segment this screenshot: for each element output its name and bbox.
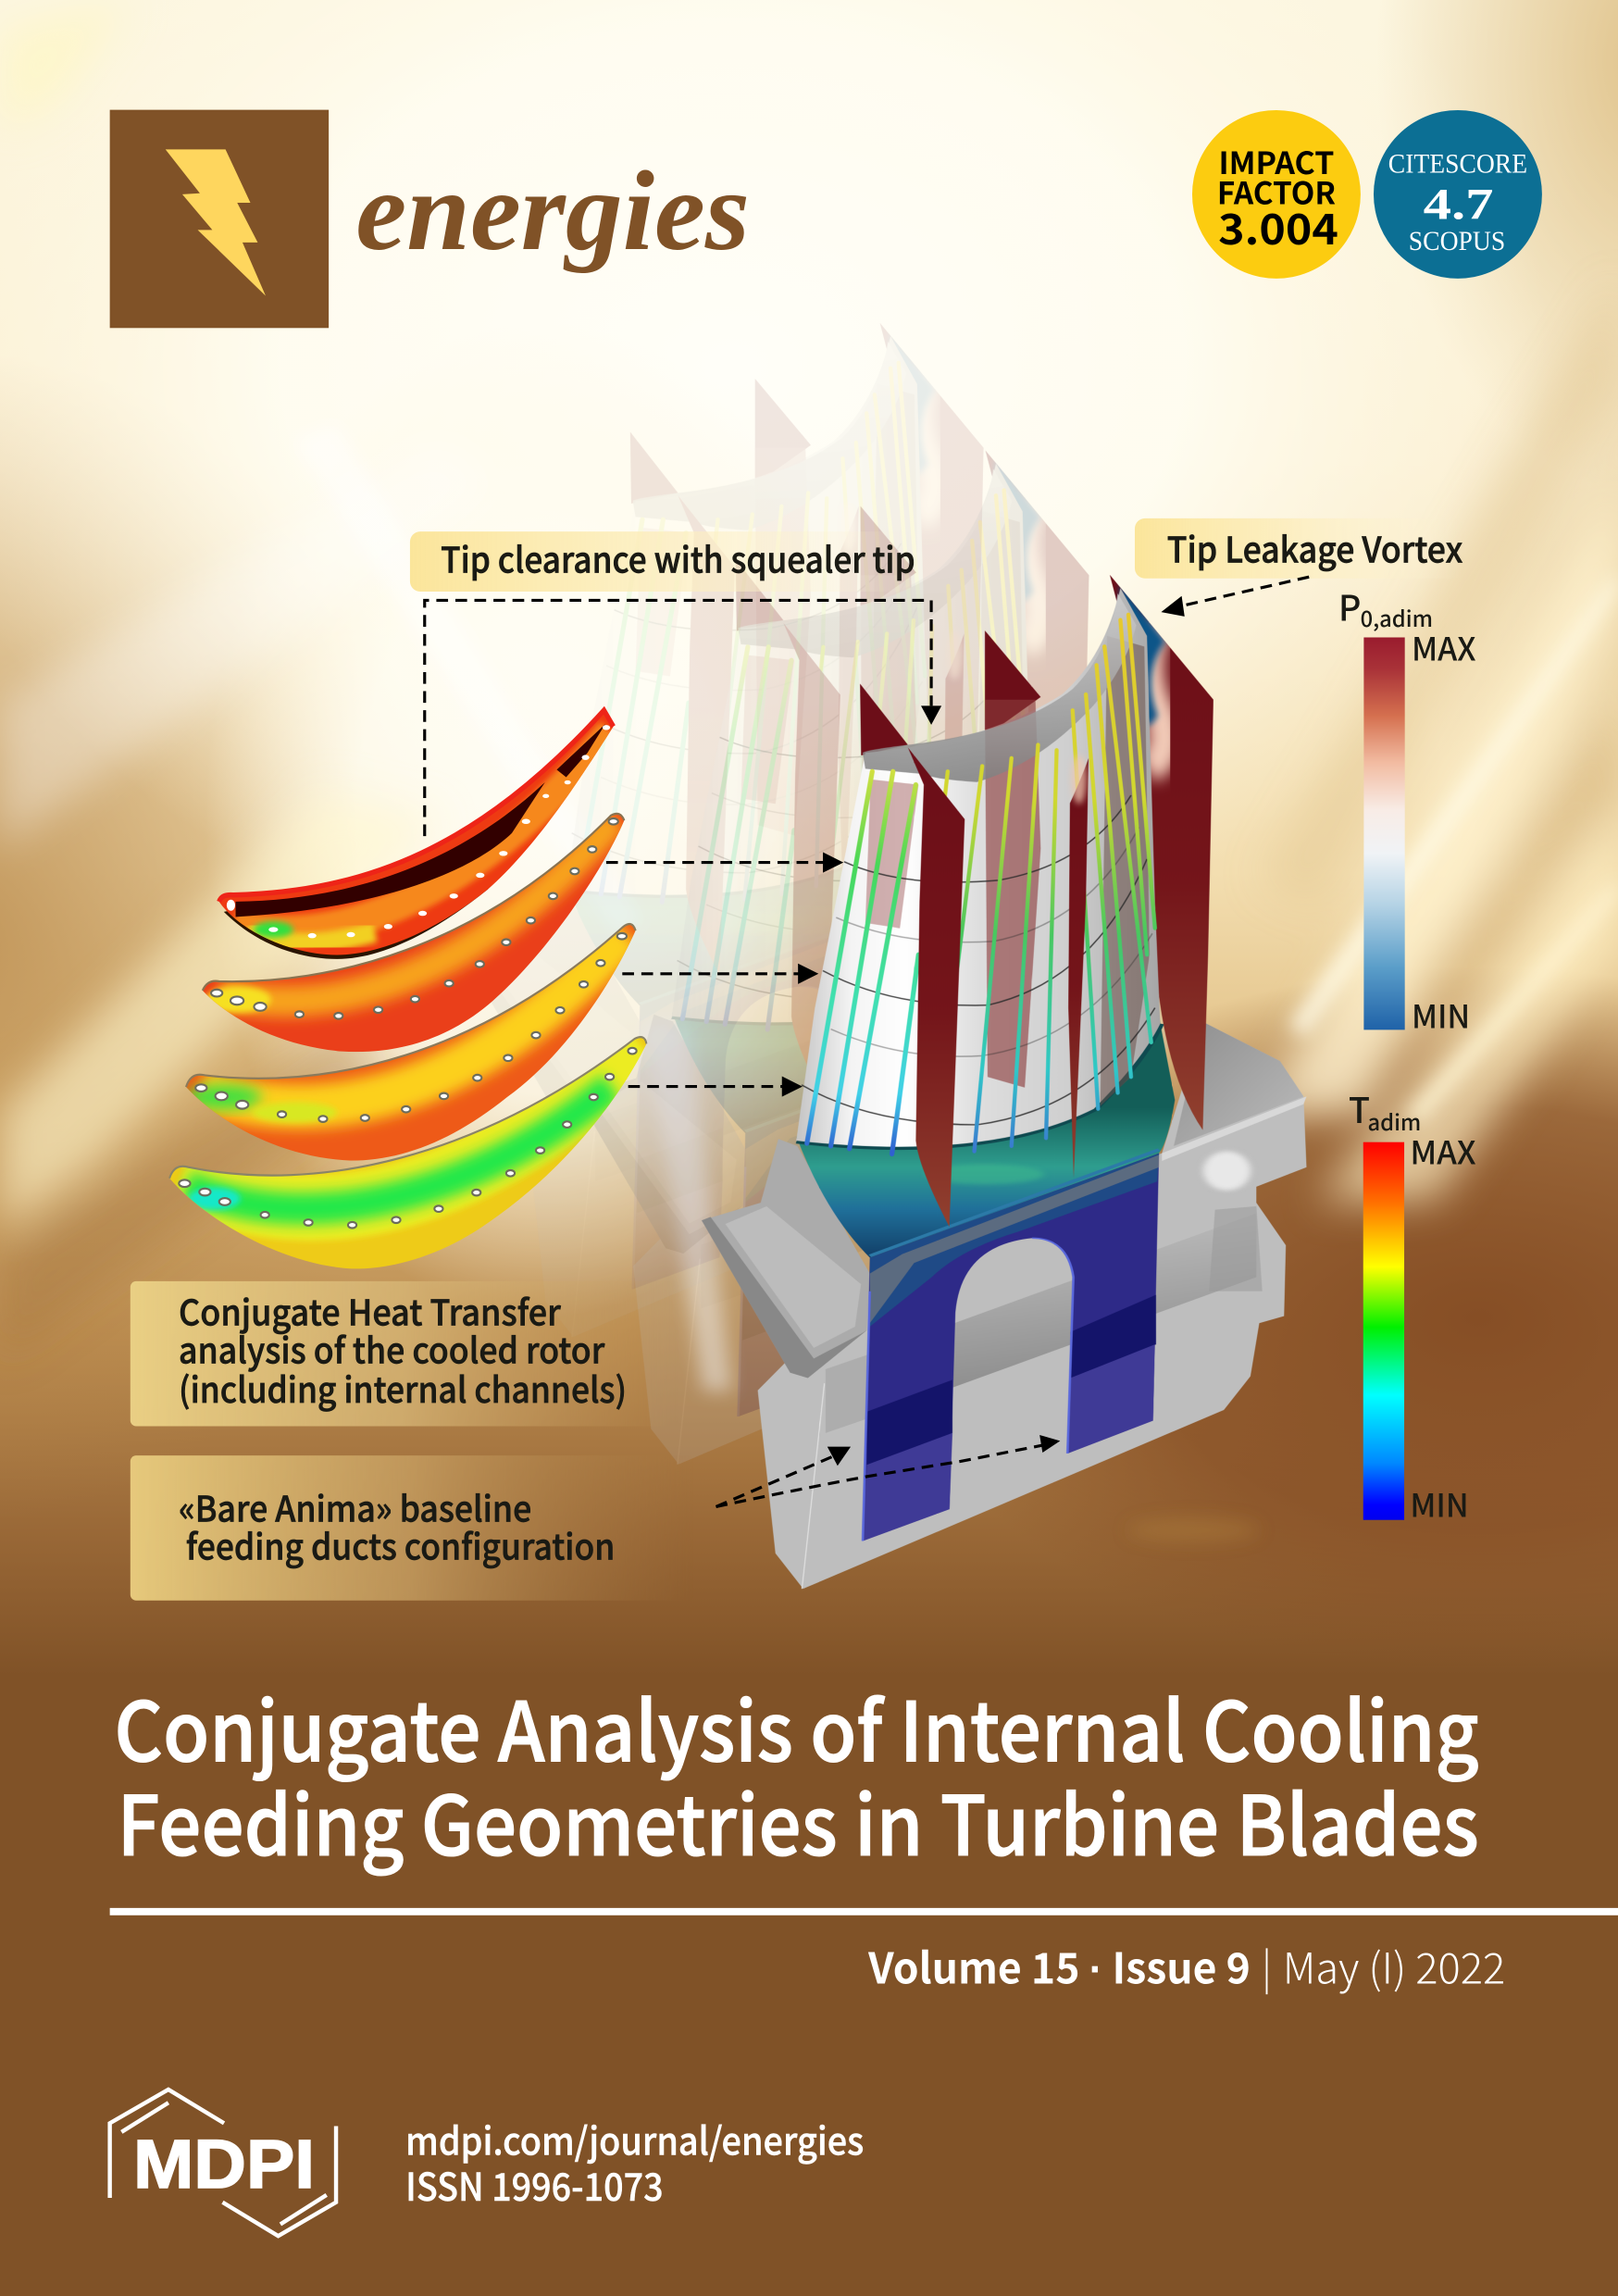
- arrow: tip clearance to squealer tip: [425, 600, 941, 836]
- teal hub surface: [797, 1020, 1175, 1257]
- section 1: squealer tip: [209, 701, 625, 965]
- legend: temperature colour bar: MAX: [1410, 1128, 1476, 1174]
- pressure fin, right: [1110, 575, 1214, 1130]
- section 4: [165, 1031, 651, 1275]
- journal URL and ISSN: [405, 2110, 864, 2212]
- legend: pressure colour bar: 0,adim: [1361, 601, 1433, 633]
- arrow: section 4 to blade: [629, 1076, 803, 1097]
- cooling channels, trailing group: [945, 615, 1155, 1152]
- article title: Conjugate Analysis of Internal Cooling: [114, 1666, 1479, 1786]
- left fin front: [908, 747, 965, 1227]
- title rule: [110, 1908, 1618, 1915]
- badge: impact factor: [1192, 110, 1361, 279]
- journal URL and ISSN: mdpi.com/journal/energies: [405, 2110, 864, 2165]
- legend: temperature colour bar: T: [1349, 1082, 1370, 1133]
- article title: Feeding Geometries in Turbine Blades: [118, 1760, 1479, 1879]
- blade body: [796, 588, 1160, 1147]
- callout: tip leakage vortex: Tip Leakage Vortex: [1167, 521, 1462, 572]
- MDPI logo: [110, 2090, 336, 2236]
- callout: tip clearance: Tip clearance with squealer tip: [441, 531, 915, 582]
- legend: pressure colour bar: [1338, 580, 1476, 1038]
- article title: [114, 1666, 1479, 1879]
- blue feeding ducts: [863, 1153, 1159, 1541]
- volume and issue: [867, 1935, 1505, 1996]
- left fin upper part: [860, 683, 908, 755]
- legend: temperature colour bar: [1349, 1082, 1476, 1528]
- callout: conjugate heat transfer: (including internal channels): [179, 1362, 627, 1413]
- arrow: section 3 to blade: [622, 964, 818, 984]
- blade airfoil body, fins, cooling channels: [796, 575, 1214, 1227]
- arrow: section 2 to blade: [606, 853, 843, 873]
- volume and issue: May (I) 2022: [1283, 1935, 1505, 1996]
- 3D turbine blade model: [702, 575, 1306, 1589]
- legend: pressure colour bar: P: [1338, 580, 1361, 631]
- legend: temperature colour bar: MIN: [1410, 1481, 1469, 1528]
- volume and issue: Volume 15 · Issue 9: [867, 1935, 1251, 1996]
- badge: impact factor: 3.004: [1218, 196, 1338, 257]
- callout: bare anima: «Bare Anima» baseline: [179, 1480, 531, 1531]
- ghost image of turbine, far: [472, 323, 1077, 1337]
- badge: impact factor: FACTOR: [1217, 168, 1336, 214]
- arrow: tip leakage vortex: [1161, 577, 1309, 617]
- callout: conjugate heat transfer: analysis of the cooled rotor: [179, 1323, 605, 1373]
- MDPI logo: MDPI: [133, 2126, 315, 2202]
- journal URL and ISSN: ISSN 1996-1073: [405, 2156, 664, 2212]
- badge: citescore: SCOPUS: [1409, 225, 1505, 256]
- section curves: [802, 795, 1155, 1125]
- icon: lightning bolt: [166, 149, 266, 295]
- callout: bare anima: feeding ducts configuration: [186, 1518, 615, 1569]
- journal logo: [110, 110, 329, 328]
- middle fin front strip: [1068, 758, 1089, 1178]
- squealer tip: [863, 593, 1137, 782]
- journal name: energies: [355, 147, 750, 274]
- badge: citescore: 4.7: [1424, 181, 1494, 229]
- middle fin upper part: [985, 630, 1040, 737]
- section 3: [181, 919, 644, 1168]
- cooling channels, leading group: [807, 771, 918, 1154]
- legend: temperature colour bar: adim: [1367, 1104, 1421, 1137]
- airfoil temperature sections: [165, 701, 651, 1275]
- legend: pressure colour bar: MAX: [1412, 624, 1476, 670]
- badge: impact factor: IMPACT: [1218, 138, 1334, 183]
- legend: pressure colour bar: MIN: [1412, 992, 1470, 1038]
- blade root and platform: [702, 1022, 1306, 1589]
- callout: conjugate heat transfer: [131, 1281, 679, 1427]
- callout: bare anima: [131, 1455, 694, 1601]
- section 2: [195, 807, 630, 1062]
- badge: citescore: [1374, 110, 1542, 279]
- arrows: feeding ducts: [716, 1435, 1060, 1507]
- ghost image of turbine, near: [578, 450, 1182, 1465]
- badge: citescore: CITESCORE: [1388, 148, 1527, 180]
- callout: conjugate heat transfer: Conjugate Heat Transfer: [179, 1284, 561, 1335]
